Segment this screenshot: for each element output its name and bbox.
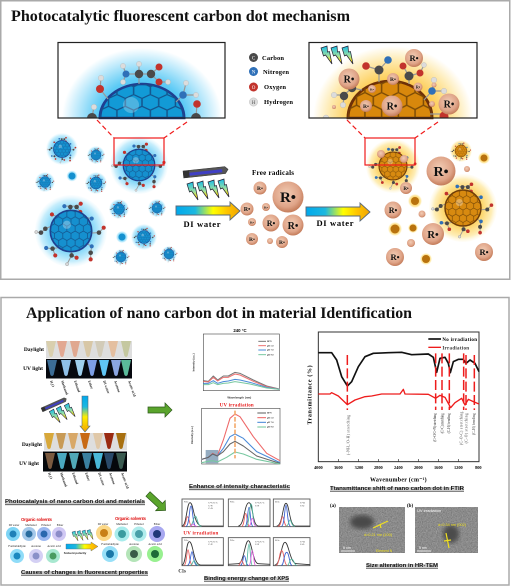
label: DI water left: DI water	[184, 219, 221, 229]
chart: FTIR spectra: No irradiation	[442, 338, 477, 343]
caption: enhance of intensity: Enhance of intensity characteristic	[189, 484, 290, 490]
chart: intensity UV irradiation	[190, 403, 280, 464]
photo strip: before irradiation	[23, 341, 137, 397]
chart: intensity 240 C: pH 9.0	[267, 353, 274, 356]
photo strip: after irradiation: H₂O	[47, 472, 53, 480]
legend: atoms: H	[252, 101, 256, 106]
photo strip: after irradiation: Daylight	[22, 442, 42, 448]
chart: FTIR spectra: (C=C) stretching	[441, 413, 445, 433]
free radicals in product region: R•	[390, 252, 400, 262]
chart: FTIR spectra: (C-O-C) stretching	[459, 411, 463, 445]
chart: intensity 240 C: BPN	[267, 340, 272, 343]
arrow: DI water right	[306, 203, 370, 221]
inset: irradiated carbon dot with radicals: R•	[387, 102, 398, 112]
free radicals in product region: R•	[433, 165, 449, 180]
chart: FTIR spectra: (-NH₂/O-H) stretching	[346, 415, 350, 455]
legend: atoms: Oxygen	[264, 84, 286, 91]
caption: causes of changes: Causes of changes in fluorescent properties	[21, 570, 148, 576]
panel: HR-TEM image a: Element N	[376, 549, 393, 553]
panel: application in material identification	[1, 298, 509, 585]
caption: size alteration: Size alteration in HR-TEM	[366, 563, 438, 569]
chart: intensity 240 C: pH 5.0	[267, 344, 274, 347]
free radicals central cluster	[240, 182, 304, 248]
chart: FTIR spectra	[306, 332, 482, 483]
chart: XPS binding energy: C-N	[255, 543, 259, 546]
panel: solvent dots comparison: Ethanol	[134, 522, 144, 526]
free radicals in product region	[377, 150, 493, 266]
photo strip: after irradiation: Acetic acid	[120, 472, 130, 489]
panel: HR-TEM image a	[330, 504, 405, 553]
chart: intensity UV irradiation: pH 7.0	[267, 421, 274, 424]
chart: XPS binding energy: N 1s	[230, 539, 234, 542]
chart: XPS binding energy: O 1s	[275, 500, 280, 503]
chart: FTIR spectra: 1600	[434, 465, 443, 470]
orange irradiated dots cluster	[366, 139, 497, 265]
inset: irradiated carbon dot with radicals	[309, 42, 477, 118]
chart: intensity UV irradiation: Intensity (a.u.)	[190, 426, 194, 444]
photo strip: after irradiation: Acetone	[108, 472, 116, 485]
free radicals in product region: R•	[479, 247, 489, 257]
photo strip: after irradiation: Methanol	[59, 472, 68, 487]
photo strip: after irradiation: Ethanol	[71, 472, 79, 485]
chart: XPS binding energy: C=C/C-C	[255, 540, 265, 543]
free radicals central cluster: R•	[264, 206, 269, 210]
inset: irradiated carbon dot with radicals: R•	[363, 104, 369, 110]
panel: solvent dots comparison: Organic solvents	[21, 517, 53, 522]
photo strip: before irradiation: DI water	[102, 380, 111, 395]
inset: irradiated carbon dot with radicals: R•	[416, 84, 421, 90]
chart: FTIR spectra: 800	[475, 465, 482, 470]
chart: intensity 240 C: pH 7.0	[267, 349, 274, 352]
photo strip: after irradiation: DI water	[97, 472, 106, 487]
arrow: green right	[148, 403, 172, 417]
caption: photocatalysis: Photocatalysis of nano carbon dot and materials	[5, 499, 145, 505]
photo strip: before irradiation: H₂O	[49, 380, 55, 388]
panel: solvent dots comparison: DI water	[98, 522, 108, 526]
chart: intensity UV irradiation: UV irradiation	[220, 403, 254, 408]
panel: solvent dots comparison: Ether	[57, 523, 63, 527]
panel: solvent dots comparison: Formaldehyde	[101, 542, 119, 546]
free radicals central cluster: R•	[249, 237, 255, 243]
chart: FTIR spectra: 2400	[394, 465, 403, 470]
chart: FTIR spectra: 1200	[454, 465, 463, 470]
chart: FTIR spectra: 3200	[355, 465, 363, 470]
legend: atoms: Carbon	[262, 55, 284, 62]
inset: irradiated carbon dot with radicals: R•	[344, 74, 355, 86]
inset: irradiated carbon dot with radicals: R•	[370, 88, 375, 92]
free radicals in product region: R•	[403, 187, 409, 192]
panel: HR-TEM image a: d=0.21 nm (100)	[364, 533, 393, 537]
chart: FTIR spectra: 3600	[334, 465, 343, 470]
photo strip: before irradiation: UV light	[23, 366, 43, 372]
panel: HR-TEM image a: (a)	[330, 504, 336, 509]
arrow: DI water left	[176, 202, 240, 220]
chart: XPS binding energy: C=O	[300, 502, 305, 505]
panel: HR-TEM image b: UV irradiation	[417, 508, 441, 513]
inset: irradiated carbon dot with radicals: R•	[409, 53, 419, 63]
icon: UV lamp and bolts	[183, 166, 229, 200]
panel: HR-TEM image b: d=0.34 nm (002)	[438, 523, 467, 527]
free radicals in product region: R•	[389, 206, 397, 215]
chart: FTIR spectra: (C-O) stretching	[465, 413, 469, 443]
chart: XPS binding energy: N 1s	[184, 539, 188, 542]
chart: XPS binding energy: C=C/C-C	[208, 502, 218, 505]
panel: solvent dots comparison: Methanol	[25, 523, 37, 527]
chart: intensity UV irradiation: BPN	[267, 412, 272, 415]
chart: FTIR spectra: (C=O/C=N) stretching	[433, 413, 437, 442]
chart: intensity 240 C: Intensity (a.u.)	[191, 353, 195, 371]
panel: solvent dots comparison: Organic solvents	[115, 516, 147, 521]
title: Photocatalytic fluorescent carbon dot mechanism	[11, 8, 351, 25]
photo strip: before irradiation: Acetone	[113, 380, 121, 393]
chart: XPS binding energy: C-N	[208, 504, 213, 507]
free radicals central cluster: R•	[250, 220, 255, 224]
free radicals in product region: R•	[427, 230, 439, 241]
chart: XPS binding energy	[178, 499, 310, 575]
chart: XPS binding energy: O 1s	[275, 539, 280, 542]
panel: HR-TEM image b: 5 nm	[419, 546, 427, 550]
chart: XPS binding energy: C=C/C-C	[255, 502, 265, 505]
chart: XPS binding energy: C-N	[255, 504, 259, 507]
panel: solvent dots comparison: Solvent polarity	[64, 551, 87, 555]
panel: HR-TEM image b: (b)	[407, 504, 413, 509]
chart: XPS binding energy: UV irradiation	[183, 532, 219, 537]
chart: FTIR spectra: (C-H) bending	[472, 413, 476, 435]
chart: XPS binding energy: C=C/C-C	[208, 540, 218, 543]
chart: XPS binding energy: C-O	[300, 543, 304, 546]
legend: atoms: C	[252, 56, 256, 62]
free radicals label: Free radicals	[252, 169, 294, 177]
legend: atoms	[249, 53, 293, 106]
photo strip: after irradiation: Ether	[84, 472, 91, 482]
free radicals central cluster: R•	[279, 240, 285, 246]
panel: HR-TEM image a: 5 nm	[343, 546, 351, 550]
panel: solvent dots comparison: Acetone	[129, 542, 140, 546]
photo strip: after irradiation: UV light	[19, 461, 39, 467]
panel: solvent dots comparison: Acetic acid	[148, 542, 162, 546]
free radicals central cluster: R•	[257, 186, 263, 192]
photo strip: before irradiation: Methanol	[60, 380, 69, 395]
legend: atoms: N	[252, 70, 256, 76]
chart: FTIR spectra: Irradiation	[442, 346, 469, 351]
inset: irradiated carbon dot with radicals: R•	[444, 100, 455, 110]
panel: solvent dots comparison: Ethanol	[41, 523, 51, 527]
panel: solvent dots comparison: Ether	[154, 522, 160, 526]
photo strip: before irradiation: Daylight	[24, 347, 44, 353]
panel: photocatalytic mechanism	[1, 1, 510, 279]
chart: FTIR spectra: 4000	[314, 465, 323, 470]
chart: intensity UV irradiation: pH 9.0	[267, 426, 274, 429]
blue carbon dots cluster	[35, 133, 177, 267]
chart: XPS binding energy: C-O	[300, 504, 304, 507]
chart: intensity 240 C: 240 °C	[233, 328, 247, 333]
chart: FTIR spectra: (C-H) bending	[447, 413, 451, 433]
chart: XPS binding energy: C=O	[300, 540, 305, 543]
icon: small UV lamp and bolts	[41, 397, 75, 424]
heading: Application of nano carbon dot in material Identification	[26, 305, 412, 322]
legend: atoms: Nitrogen	[263, 69, 289, 76]
chart: XPS binding energy: C1s	[178, 570, 186, 575]
arrow: green diagonal	[143, 489, 170, 515]
chart: intensity UV irradiation: pH 5.0	[267, 416, 274, 419]
inset: irradiated carbon dot with radicals: R•	[390, 77, 396, 83]
photo strip: before irradiation: Ethanol	[73, 380, 81, 393]
label: DI water right: DI water	[316, 218, 354, 228]
panel: solvent dots comparison: Methanol	[116, 522, 128, 526]
caption: XPS: Binding energy change of XPS	[204, 576, 289, 582]
panel: solvent dots comparison: DI water	[9, 523, 19, 527]
legend: atoms: O	[252, 86, 256, 91]
arrow: gradient down	[80, 396, 90, 432]
chart: XPS binding energy: N 1s	[230, 500, 234, 503]
panel: solvent dots comparison: Formaldehyde	[8, 544, 26, 548]
free radicals central cluster: R•	[244, 207, 250, 213]
photo strip: before irradiation: Acetic acid	[127, 380, 137, 397]
chart: XPS binding energy: C-N	[208, 543, 213, 546]
chart: FTIR spectra: Wavenumber (cm⁻¹)	[370, 476, 427, 483]
photo strip: after irradiation	[19, 433, 130, 489]
chart: FTIR spectra: 2000	[414, 465, 423, 470]
free radicals central cluster: R•	[288, 221, 299, 232]
legend: atoms: Hydrogen	[264, 99, 293, 106]
photo strip: before irradiation: Ether	[87, 380, 94, 390]
chart: XPS binding energy: C-O	[208, 507, 213, 510]
panel: solvent dots comparison: Acetic acid	[47, 544, 61, 548]
red zoom boxes and leaders	[97, 120, 438, 165]
chart: intensity 240 C	[191, 328, 279, 399]
chart: intensity 240 C: Wavelength (nm)	[227, 395, 251, 399]
inset: pristine carbon dot surface	[58, 42, 225, 118]
panel: solvent dots comparison: Acetone	[31, 544, 42, 548]
panel: solvent dots comparison	[6, 516, 165, 563]
free radicals central cluster: R•	[280, 190, 296, 206]
chart: XPS binding energy: N 1s	[184, 500, 188, 503]
free radicals central cluster: R•	[267, 219, 275, 228]
caption: FTIR: Ttansmittance shift of nano carbon dot in FTIR	[330, 486, 464, 492]
chart: FTIR spectra: 2800	[374, 465, 383, 470]
chart: FTIR spectra: Transmittance (%)	[306, 365, 313, 425]
panel: HR-TEM image b	[407, 504, 478, 553]
